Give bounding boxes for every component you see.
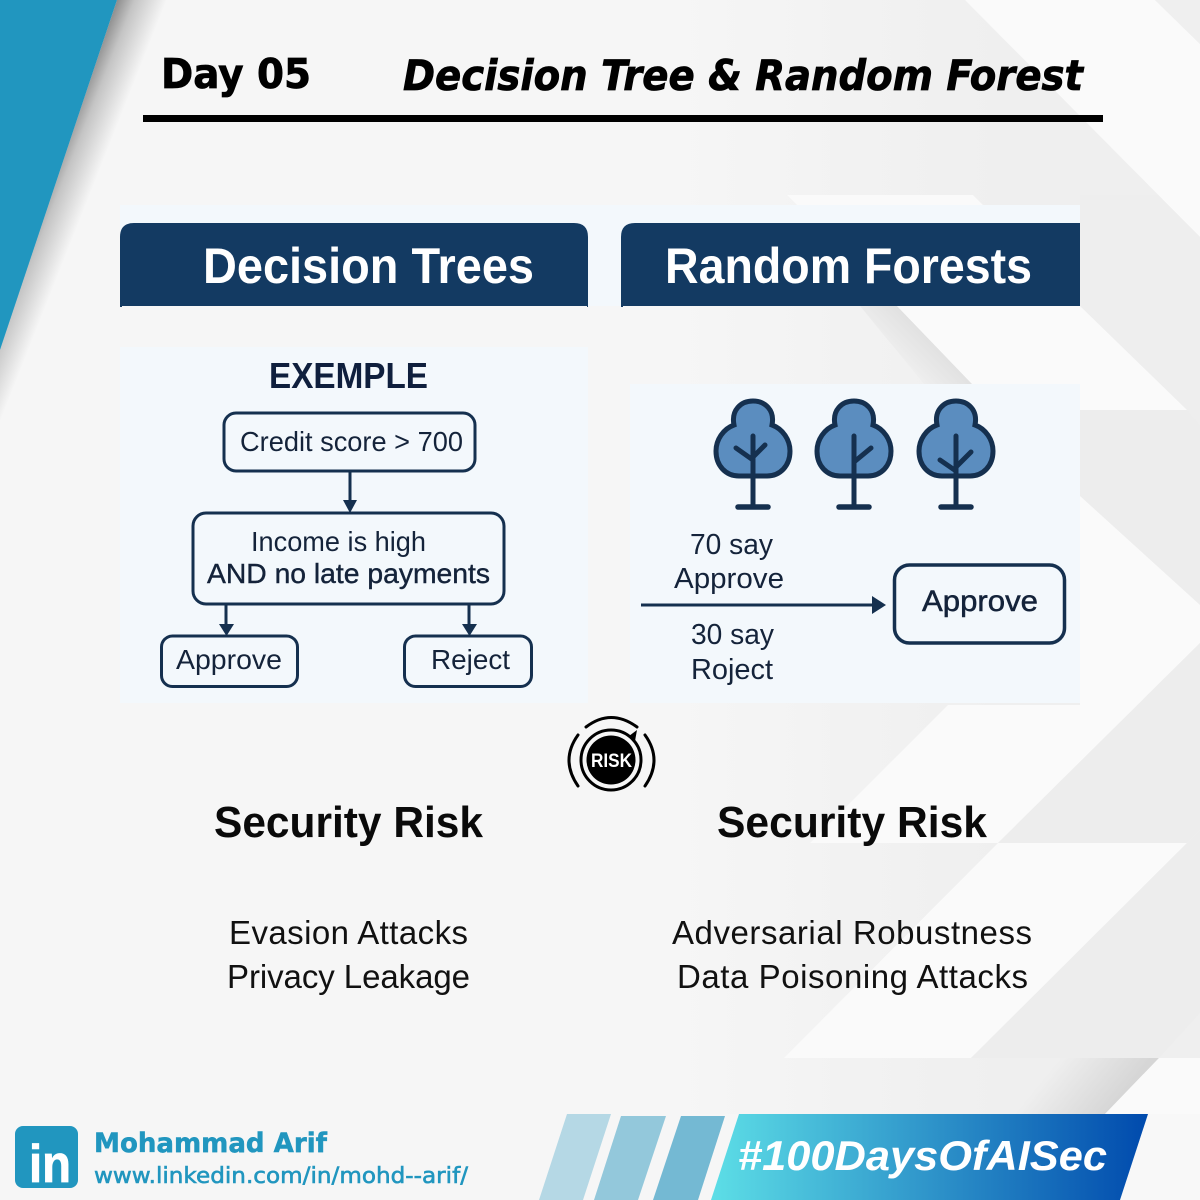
text: random forest risks: Data Poisoning Attacks — [677, 958, 1028, 995]
node: approve result — [894, 565, 1064, 643]
icon: risk badge: RISK — [591, 751, 632, 772]
heading: security risk right: Security Risk — [717, 798, 988, 847]
header: Decision Trees: Decision Trees — [203, 238, 534, 294]
label: 70 say approve: 70 say — [690, 529, 773, 561]
arrow: to reject — [462, 604, 477, 636]
icon: linkedin: in — [29, 1135, 71, 1194]
node: reject: Reject — [431, 644, 510, 675]
node: income — [193, 513, 504, 604]
decorative stripes — [539, 1114, 725, 1200]
node: income: Income is high — [251, 526, 426, 557]
label: 30 say reject: 30 say — [691, 619, 774, 651]
author name and link: www.linkedin.com/in/mohd--arif/ — [94, 1164, 469, 1189]
node: approve — [162, 636, 298, 686]
hashtag banner: #100DaysOfAISec — [738, 1132, 1107, 1179]
arrow: votes to result — [641, 596, 886, 614]
arrow: credit to income — [343, 471, 357, 513]
icon: linkedin — [15, 1126, 78, 1194]
heading: security risk left: Security Risk — [214, 798, 484, 847]
header: Random Forests — [621, 223, 1080, 307]
header: Random Forests: Random Forests — [665, 238, 1032, 294]
node: reject — [404, 636, 532, 686]
label: 70 say approve — [674, 529, 784, 595]
top-left blue corner with shadow — [0, 0, 167, 424]
text: decision tree risks: Privacy Leakage — [227, 958, 470, 995]
label: 70 say approve: Approve — [674, 563, 784, 595]
label: 30 say reject: Roject — [691, 654, 773, 686]
text: random forest risks: Adversarial Robustness — [672, 914, 1032, 951]
icon: tree 1 — [716, 401, 790, 507]
panel: headers — [120, 205, 1080, 307]
title: Day 05 — [161, 50, 311, 98]
panel: decision tree example — [120, 347, 588, 703]
hashtag banner — [711, 1114, 1148, 1200]
node: income: AND no late payments — [207, 558, 490, 589]
text: random forest risks — [672, 914, 1032, 995]
title underline — [143, 115, 1103, 122]
node: credit score — [224, 413, 475, 471]
text: decision tree risks: Evasion Attacks — [229, 914, 468, 951]
text: decision tree risks — [227, 914, 470, 995]
arrow: to approve — [219, 604, 234, 636]
header: Decision Trees — [120, 223, 588, 307]
node: approve result: Approve — [922, 585, 1038, 618]
node: approve: Approve — [176, 644, 282, 675]
icon: tree 3 — [919, 401, 993, 507]
author name and link — [94, 1128, 469, 1189]
panel: random forest example — [630, 384, 1080, 703]
title — [161, 50, 1085, 100]
author name and link: Mohammad Arif — [94, 1128, 327, 1159]
node: credit score: Credit score > 700 — [240, 426, 463, 457]
icon: tree 2 — [817, 401, 891, 507]
label: 30 say reject — [691, 619, 774, 686]
icon: risk badge — [569, 718, 654, 790]
heading: EXEMPLE: EXEMPLE — [269, 355, 428, 396]
title: Decision Tree & Random Forest — [403, 51, 1085, 100]
